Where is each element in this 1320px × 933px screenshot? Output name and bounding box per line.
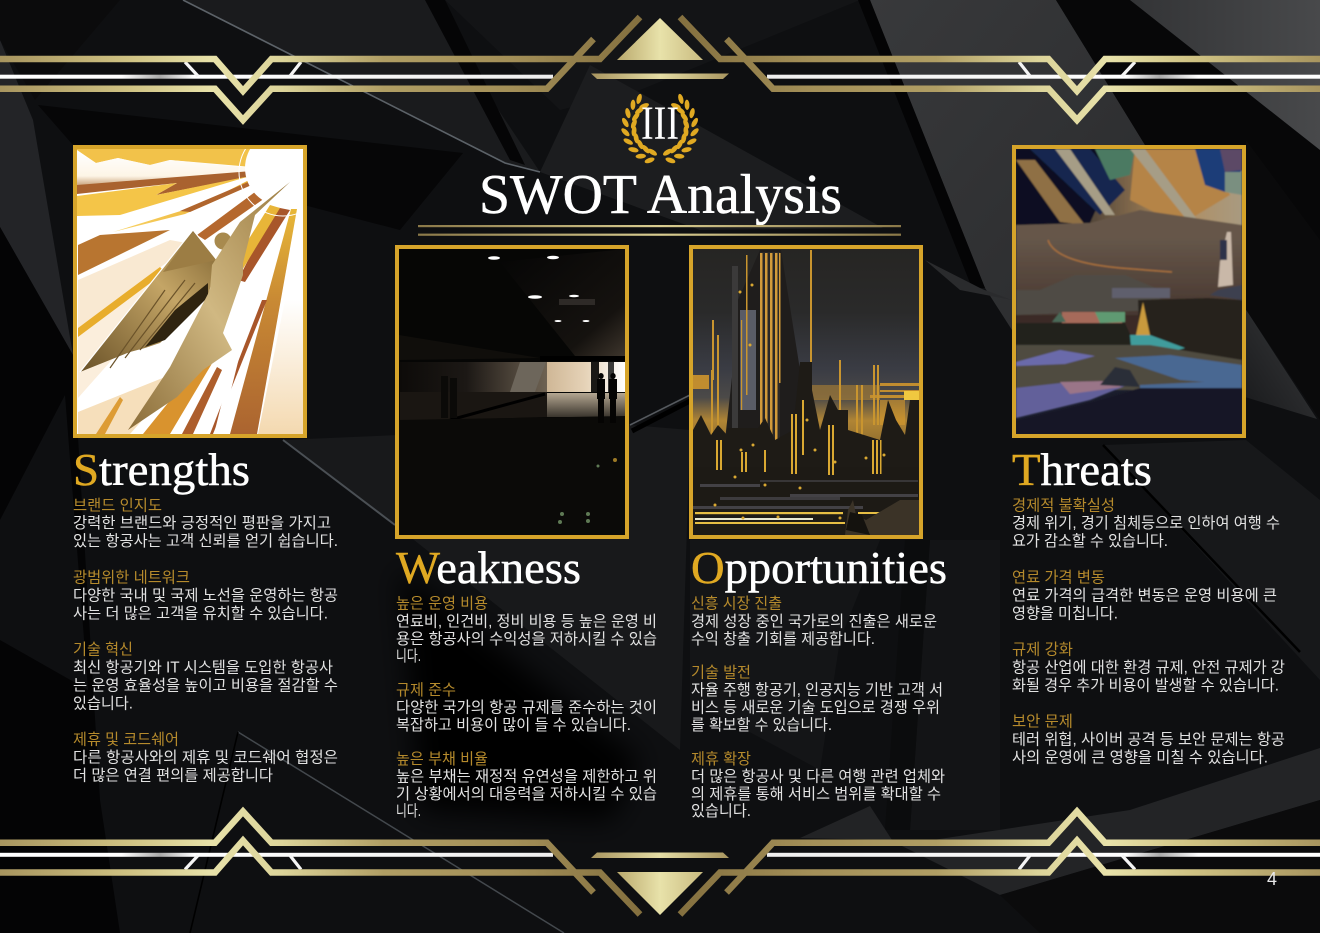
text block: opportunities items: 경제 성장 중인 국가로의 진출은 새로운 — [691, 612, 937, 630]
text block: weakness items: 니다. — [396, 802, 421, 820]
heading: Weakness: Weakness — [396, 542, 581, 593]
text block: weakness items: 규제 준수 — [396, 681, 456, 699]
text block: opportunities items: 더 많은 항공사 및 다른 여행 관련 업체와 — [691, 768, 945, 786]
bottom ornament: mirrored gold and white art-deco lines — [0, 812, 1320, 915]
icon: laurel wreath with numeral III — [619, 92, 701, 166]
text block: threats items: 경제 위기, 경기 침체등으로 인하여 여행 수 — [1012, 514, 1280, 532]
illustration: winged figure flying into golden sun rays — [73, 145, 307, 438]
illustration: painted harbor town under a stormy sky — [1014, 147, 1244, 436]
panel: Strengths — [73, 128, 338, 784]
heading: Opportunities: Opportunities — [691, 542, 947, 593]
text block: opportunities items: 수익 창출 기회를 제공합니다. — [691, 630, 875, 648]
text block: weakness items: 높은 부채 비율 — [396, 750, 488, 768]
icon: top gold triangle — [617, 18, 703, 60]
text block: weakness items: 높은 운영 비용 — [396, 594, 488, 612]
text block: strengths items: 제휴 및 코드쉐어 — [73, 730, 179, 748]
text block: strengths items: 있는 항공사는 고객 신뢰를 얻기 쉽습니다. — [73, 532, 338, 550]
text block: opportunities items: 제휴 확장 — [691, 750, 751, 768]
text block: threats items: 보안 문제 — [1012, 712, 1073, 730]
text block: threats items: 연료 가격의 급격한 변동은 운영 비용에 큰 — [1012, 586, 1277, 604]
text block: threats items: 항공 산업에 대한 환경 규제, 안전 규제가 강 — [1012, 658, 1285, 676]
text block: strengths items: 더 많은 연결 편의를 제공합니다 — [73, 766, 273, 784]
text block: strengths items: 브랜드 인지도 — [73, 496, 162, 514]
text block: opportunities items: 자율 주행 항공기, 인공지능 기반 고객 서 — [691, 681, 943, 699]
title: SWOT Analysis — [479, 164, 842, 226]
text block: strengths items: 광범위한 네트워크 — [73, 568, 190, 586]
text block: weakness items: 다양한 국가의 항공 규제를 준수하는 것이 — [396, 698, 657, 716]
text block: threats items: 규제 강화 — [1012, 640, 1073, 658]
text block: opportunities items: 기술 발전 — [691, 664, 751, 682]
text block: threats items: 요가 감소할 수 있습니다. — [1012, 532, 1168, 550]
text block: strengths items: 강력한 브랜드와 긍정적인 평판을 가지고 — [73, 514, 331, 532]
icon: laurel wreath with numeral III: III — [641, 97, 679, 150]
text block: strengths items: 사는 더 많은 고객을 유치할 수 있습니다. — [73, 604, 328, 622]
text block: opportunities items: 의 제휴를 통해 서비스 범위를 확대할 수 — [691, 785, 941, 803]
text block: threats items: 사의 운영에 큰 영향을 미칠 수 있습니다. — [1012, 748, 1268, 766]
page number: 4 — [1267, 869, 1277, 889]
text block: threats items: 연료 가격 변동 — [1012, 568, 1105, 586]
photo: dark underground hall with silhouettes — [397, 247, 627, 537]
illustration: art-deco city skyline at dusk — [691, 247, 921, 537]
text block: strengths items: 있습니다. — [73, 694, 133, 712]
text block: strengths items: 다양한 국내 및 국제 노선을 운영하는 항공 — [73, 586, 338, 604]
text block: threats items: 영향을 미칩니다. — [1012, 604, 1118, 622]
text block: opportunities items: 를 확보할 수 있습니다. — [691, 716, 832, 734]
icon: bottom gold triangle — [617, 872, 703, 915]
top ornament: gold and white art-deco lines — [0, 17, 1320, 120]
text block: opportunities items: 있습니다. — [691, 802, 751, 820]
text block: weakness items: 연료비, 인건비, 정비 비용 등 높은 운영 비 — [396, 612, 657, 630]
text block: weakness items: 높은 부채는 재정적 유연성을 제한하고 위 — [396, 768, 657, 786]
heading: Strengths: Strengths — [73, 444, 250, 495]
text block: opportunities items — [691, 594, 945, 820]
text block: strengths items: 최신 항공기와 IT 시스템을 도입한 항공사 — [73, 658, 333, 676]
text block: weakness items: 기 상황에서의 대응력을 저하시킬 수 있습 — [396, 785, 657, 803]
text block: weakness items — [396, 594, 657, 820]
text block: weakness items: 니다. — [396, 647, 421, 665]
panel: Opportunities — [691, 247, 947, 820]
text block: strengths items: 다른 항공사와의 제휴 및 코드쉐어 협정은 — [73, 748, 338, 766]
text block: strengths items — [73, 496, 338, 784]
heading: Threats: Threats — [1012, 444, 1152, 495]
text block: threats items: 테러 위협, 사이버 공격 등 보안 문제는 항공 — [1012, 730, 1285, 748]
panel: Threats — [1012, 147, 1285, 766]
text block: opportunities items: 비스 등 새로운 기술 도입으로 경쟁 우위 — [691, 698, 940, 716]
text block: strengths items: 는 운영 효율성을 높이고 비용을 절감할 수 — [73, 676, 338, 694]
text block: threats items: 경제적 불확실성 — [1012, 496, 1115, 514]
text block: opportunities items: 신흥 시장 진출 — [691, 594, 782, 612]
text block: threats items: 화될 경우 추가 비용이 발생할 수 있습니다. — [1012, 676, 1279, 694]
text block: weakness items: 용은 항공사의 수익성을 저하시킬 수 있습 — [396, 630, 657, 648]
text block: threats items — [1012, 496, 1285, 766]
text block: weakness items: 복잡하고 비용이 많이 들 수 있습니다. — [396, 716, 631, 734]
panel: Weakness — [396, 247, 657, 820]
text block: strengths items: 기술 혁신 — [73, 640, 133, 658]
